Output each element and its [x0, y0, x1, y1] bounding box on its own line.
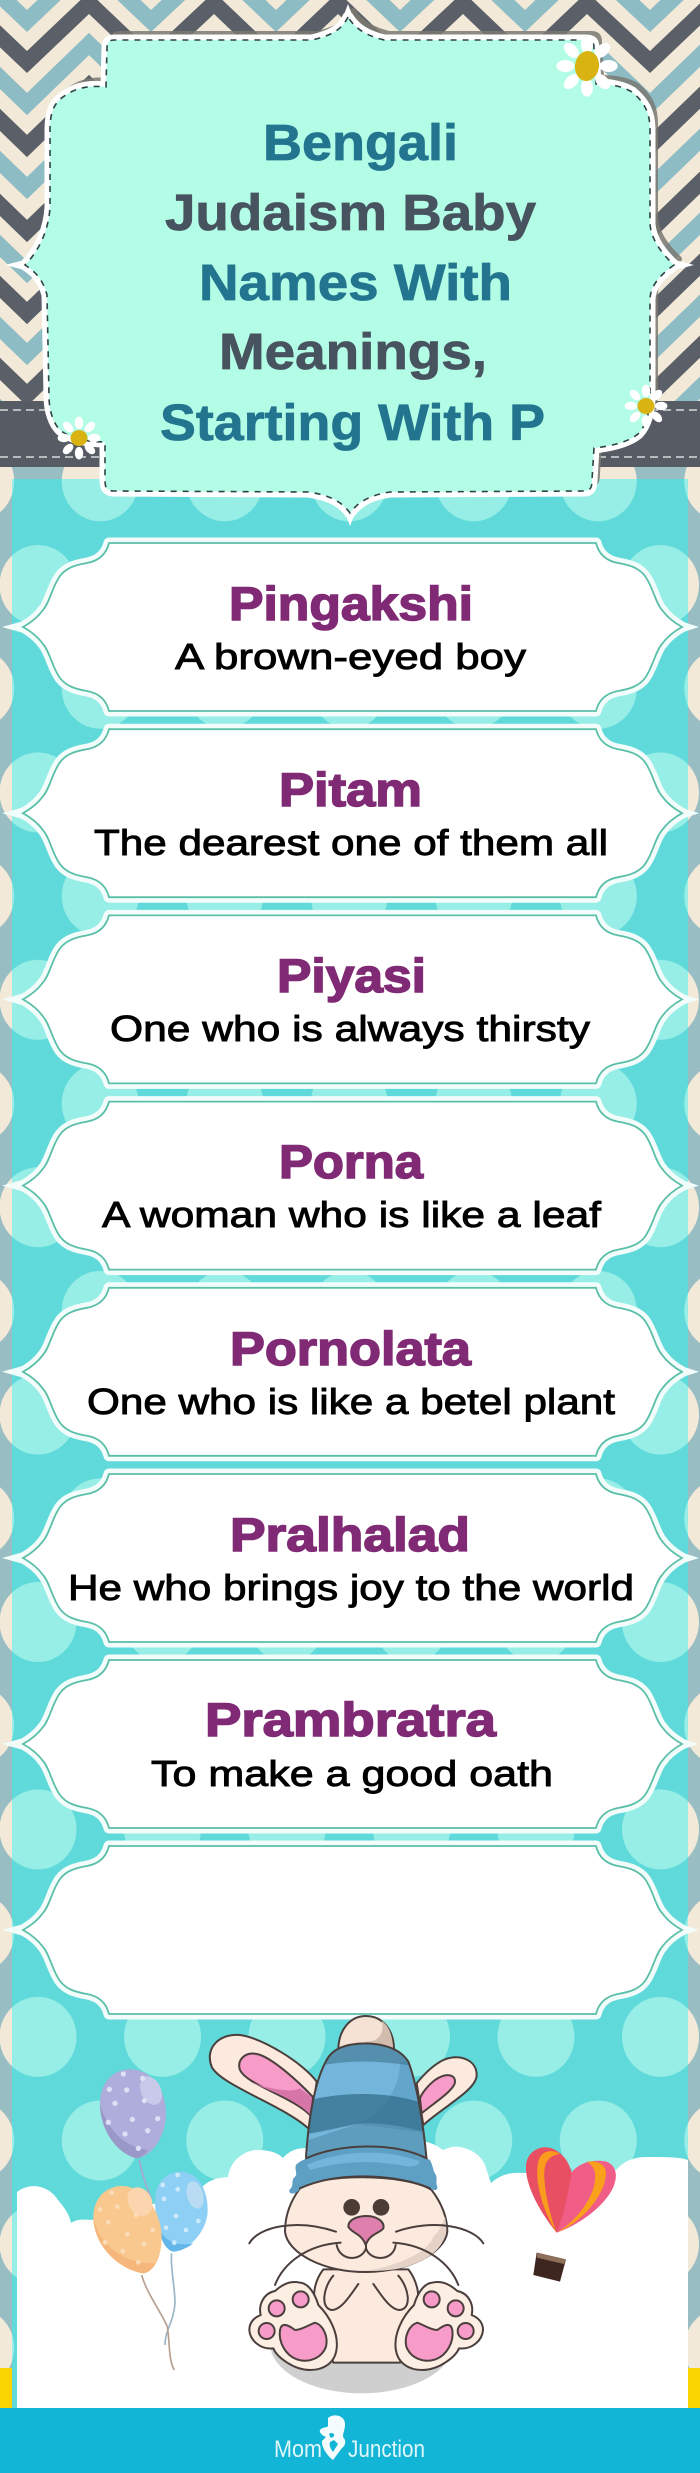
bunny shadow and body [270, 2269, 453, 2393]
card: Pralhalad: He who brings joy to the world [68, 1567, 634, 1608]
chevron header background [0, 0, 700, 436]
white cloud [17, 2142, 688, 2408]
footer bar [0, 2408, 700, 2473]
bunny right ear [417, 2057, 477, 2125]
card: Prambratra [2, 1660, 699, 1828]
title text: Starting With P [160, 394, 545, 451]
card: Pitam: The dearest one of them all [94, 822, 608, 863]
card: Piyasi: One who is always thirsty [110, 1008, 590, 1049]
logo: MomJunction: Junction [348, 2436, 425, 2463]
teal polka dot panel [12, 479, 688, 2408]
icon: balloons [93, 2069, 208, 2370]
icon: daisy bottom left [58, 417, 100, 459]
icon: daisy bottom right [625, 385, 667, 427]
card: empty [2, 1846, 699, 2014]
logo: MomJunction: Mom [274, 2436, 322, 2463]
title text [160, 114, 545, 451]
card: Prambratra: Prambratra [205, 1693, 497, 1746]
icon: daisy top right [556, 35, 618, 97]
card: Piyasi: Piyasi [277, 949, 426, 1002]
card: Porna: Porna [279, 1135, 424, 1188]
logo: MomJunction [274, 2415, 425, 2463]
icon: heart hot-air balloon [526, 2147, 616, 2282]
title text: Judaism Baby [165, 184, 537, 241]
card: Pralhalad: Pralhalad [230, 1508, 470, 1561]
card: Pornolata: Pornolata [230, 1322, 472, 1375]
card: Porna [2, 1102, 699, 1270]
card: Pingakshi: A brown-eyed boy [175, 636, 526, 677]
card: Pingakshi [2, 543, 699, 711]
card: Pornolata: One who is like a betel plant [87, 1381, 615, 1422]
title panel [5, 4, 694, 526]
card: Pingakshi: Pingakshi [229, 577, 473, 630]
card: Piyasi [2, 915, 699, 1083]
title text: Bengali [263, 114, 458, 171]
bunny head [249, 2177, 483, 2272]
dark ribbon band [0, 401, 700, 467]
bunny mouth, whiskers and feet [249, 2243, 483, 2370]
card: Pornolata [2, 1288, 699, 1456]
card: Prambratra: To make a good oath [151, 1753, 553, 1794]
bunny pompom [338, 2016, 394, 2050]
title text: Meanings, [219, 323, 487, 380]
icon: bunny with striped hat [210, 2016, 483, 2393]
title text: Names With [199, 254, 512, 311]
card: Pitam: Pitam [279, 763, 422, 816]
card: Pralhalad [2, 1474, 699, 1642]
dotted side strips [0, 467, 700, 2408]
card: Pitam [2, 729, 699, 897]
bunny striped hat [289, 2040, 437, 2194]
bunny left ear [210, 2035, 317, 2130]
card: Porna: A woman who is like a leaf [102, 1194, 602, 1235]
